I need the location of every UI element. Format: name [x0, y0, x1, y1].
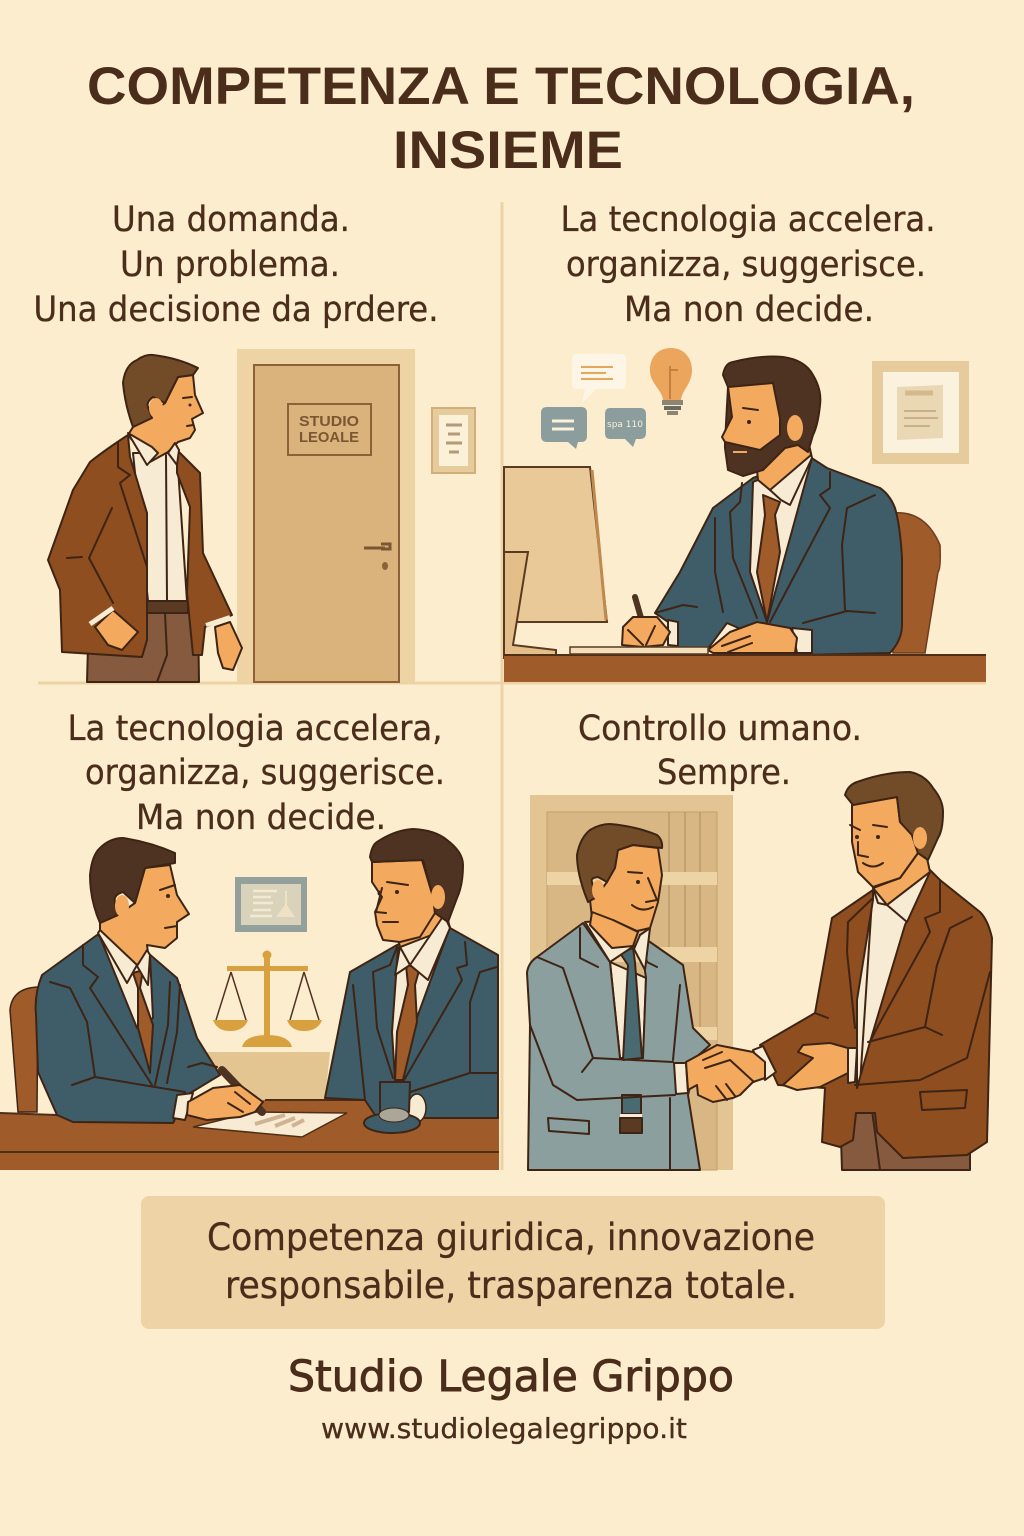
figure: left lawyer — [36, 838, 263, 1123]
icon: scales of justice — [213, 950, 322, 1047]
illustration: door: LEOALE — [299, 429, 359, 446]
caption: panel 3: organizza, suggerisce. — [85, 753, 445, 793]
illustration: bookcase — [530, 795, 733, 1170]
callout: Competenza giuridica, innovazione — [207, 1216, 815, 1259]
caption: panel 1: Un problema. — [120, 245, 340, 285]
caption: panel 4: Sempre. — [657, 753, 791, 793]
icon: handshake — [686, 1045, 776, 1102]
firm name: Studio Legale Grippo — [288, 1352, 734, 1402]
icon: wall document — [235, 877, 307, 932]
caption: panel 1 — [34, 200, 438, 330]
illustration: desk — [0, 1100, 499, 1170]
title: COMPETENZA E TECNOLOGIA, — [87, 57, 915, 116]
callout: responsabile, trasparenza totale. — [225, 1264, 797, 1307]
title — [87, 57, 915, 180]
illustration: door — [237, 349, 415, 682]
illustration: back wall — [200, 1052, 330, 1100]
caption: panel 1: Una decisione da prdere. — [34, 290, 438, 330]
illustration: desk — [504, 647, 986, 682]
figure: bearded lawyer — [622, 357, 902, 655]
caption: panel 3 — [68, 709, 445, 838]
icon: light bulb — [650, 348, 692, 415]
caption: panel 2: organizza, suggerisce. — [566, 245, 926, 285]
panel: lawyer with technology — [504, 200, 986, 682]
caption: panel 1: Una domanda. — [112, 200, 350, 240]
callout — [141, 1196, 885, 1329]
panel: two lawyers at the desk — [0, 709, 499, 1170]
illustration: computer monitor — [504, 467, 607, 658]
title: INSIEME — [393, 121, 623, 180]
figure: man in brown jacket — [760, 772, 992, 1170]
icon: speech bubbles: spa 110 — [607, 420, 643, 430]
caption: panel 2: Ma non decide. — [624, 290, 874, 330]
figure: man in brown jacket — [48, 355, 242, 682]
illustration: door: STUDIO — [299, 413, 359, 430]
illustration: chair — [893, 513, 940, 653]
panel: visitor at the door — [34, 200, 475, 682]
figure: right lawyer — [325, 829, 498, 1118]
icon: framed certificate — [872, 361, 969, 464]
website: www.studiolegalegrippo.it — [321, 1412, 687, 1445]
caption: panel 3: Ma non decide. — [136, 798, 386, 838]
caption: panel 4 — [578, 709, 862, 793]
illustration: chair — [10, 987, 38, 1112]
caption: panel 3: La tecnologia accelera, — [68, 709, 442, 749]
icon: speech bubbles — [541, 354, 646, 449]
icon: wall notice — [432, 408, 475, 473]
icon: desk stamp — [364, 1082, 426, 1133]
caption: panel 2 — [560, 200, 936, 330]
figure: man in grey coat — [527, 824, 710, 1170]
panel: handshake — [527, 709, 992, 1170]
caption: panel 2: La tecnologia accelera. — [560, 200, 936, 240]
caption: panel 4: Controllo umano. — [578, 709, 862, 749]
